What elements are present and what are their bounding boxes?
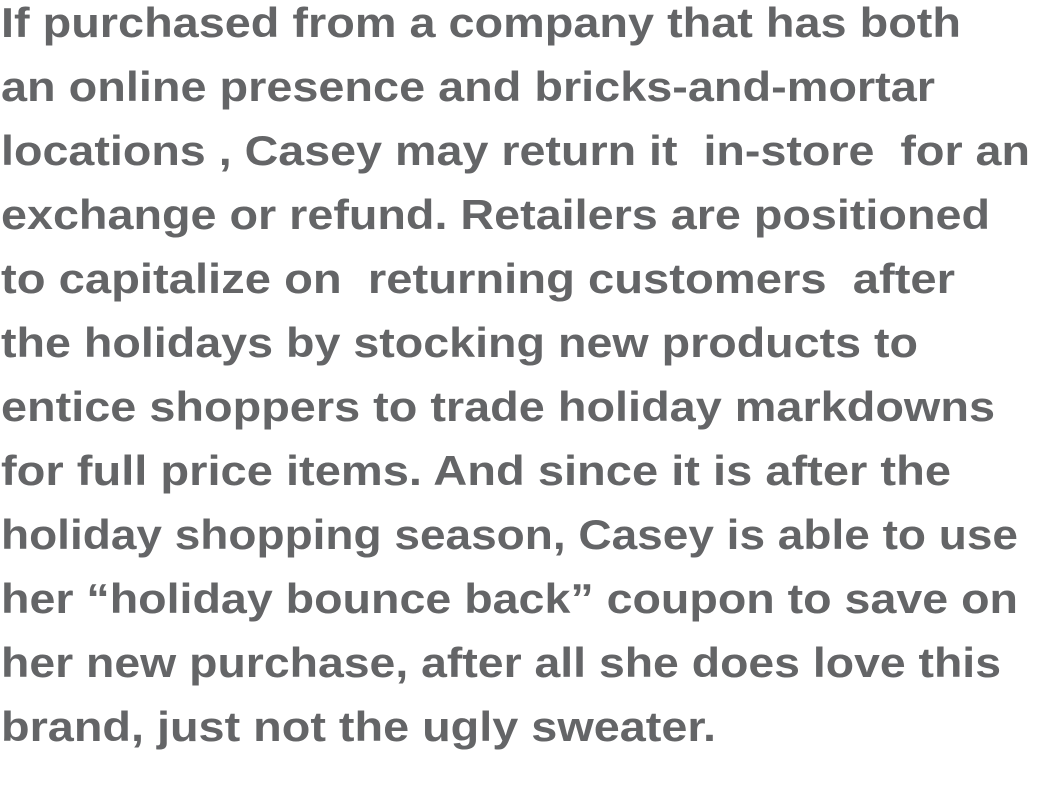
- text block: paragraph about returns: to capitalize on returning customers after: [1, 255, 955, 302]
- text block: paragraph about returns: for full price items. And since it is after the: [1, 447, 951, 494]
- text block: paragraph about returns: the holidays by stocking new products to: [1, 319, 918, 366]
- text block: paragraph about returns: holiday shopping season, Casey is able to use: [1, 511, 1018, 558]
- text block: paragraph about returns: exchange or refund. Retailers are positioned: [1, 191, 990, 238]
- text block: paragraph about returns: entice shoppers to trade holiday markdowns: [1, 383, 995, 430]
- text block: paragraph about returns: locations , Casey may return it in-store for an: [1, 127, 1030, 174]
- text block: paragraph about returns: If purchased from a company that has both: [1, 0, 961, 46]
- text block: paragraph about returns: brand, just not the ugly sweater.: [1, 703, 716, 750]
- text block: paragraph about returns: her new purchase, after all she does love this: [1, 639, 1001, 686]
- text block: paragraph about returns: her “holiday bounce back” coupon to save on: [1, 575, 1018, 622]
- text block: paragraph about returns: an online presence and bricks-and-mortar: [1, 63, 935, 110]
